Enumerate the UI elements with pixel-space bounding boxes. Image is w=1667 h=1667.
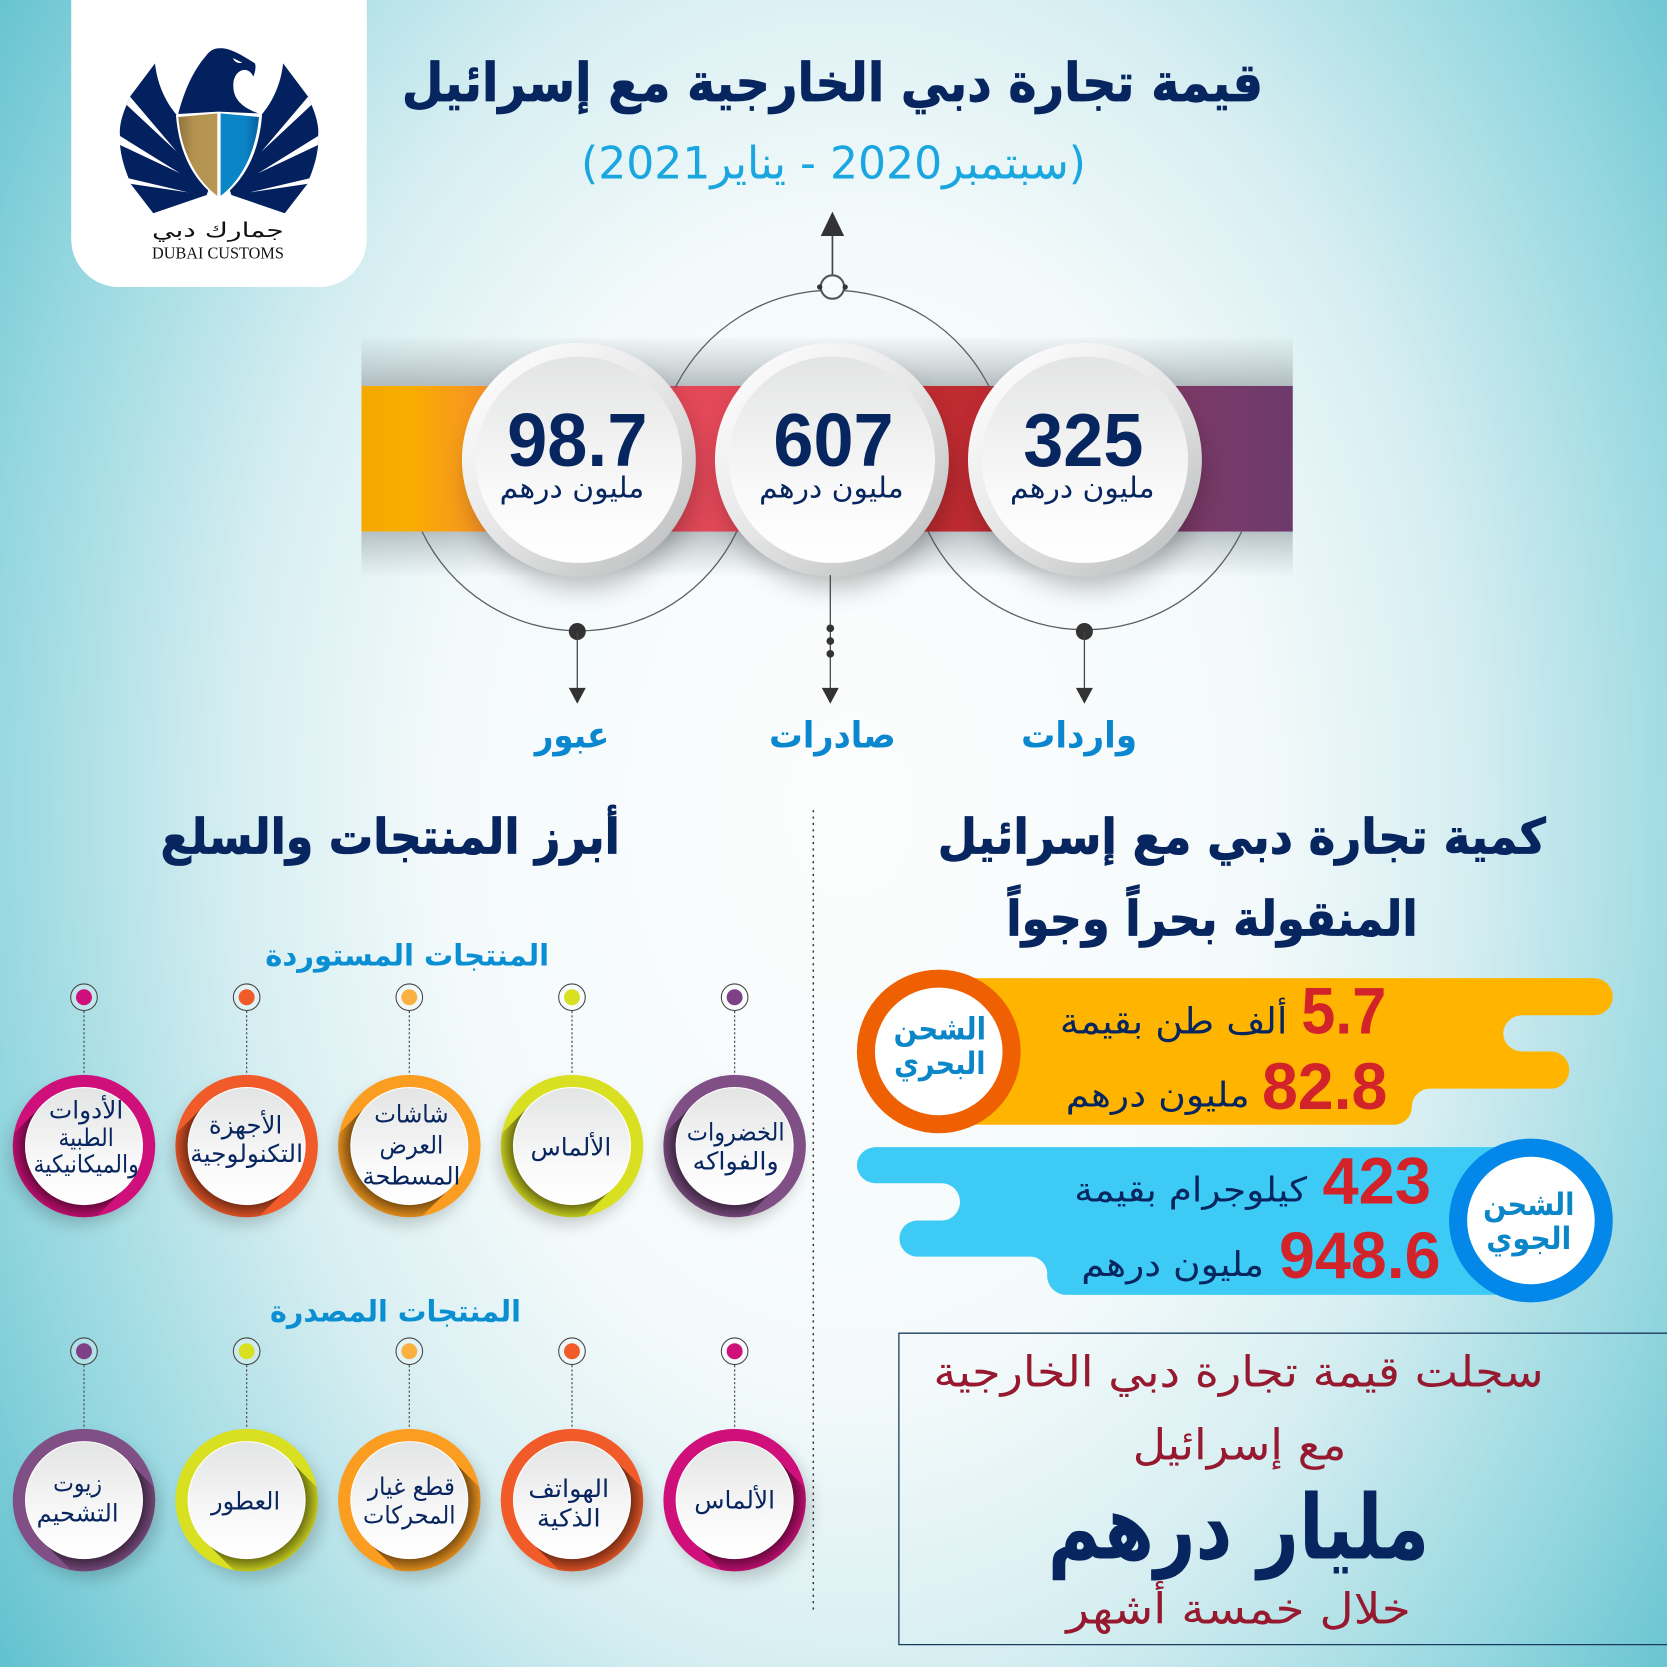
panel: air freight	[857, 1143, 1604, 1295]
item: smartphones: الذكية	[537, 1504, 601, 1533]
orange blob	[936, 978, 1613, 1125]
label: exports: صادرات	[769, 713, 896, 756]
logo card	[71, 0, 367, 287]
logo arabic name: جمارك دبي	[152, 218, 284, 243]
callout line 1: سجلت قيمة تجارة دبي الخارجية	[933, 1348, 1544, 1397]
item: engine parts: المحركات	[363, 1500, 456, 1529]
item: engine parts	[338, 1337, 492, 1585]
item: vegetables and fruit	[654, 983, 806, 1231]
value circle: transit: 98.7	[507, 398, 647, 482]
air quantity: كيلوجرام بقيمة	[1074, 1170, 1308, 1210]
panel: sea freight	[866, 973, 1613, 1125]
colored band	[361, 386, 1293, 532]
item: engine parts: قطع غيار	[366, 1472, 455, 1501]
item: smartphones: الهواتف	[528, 1474, 609, 1503]
item: medical and mechanical tools: والميكانيكية	[33, 1150, 139, 1179]
item: technology devices: التكنولوجية	[190, 1139, 303, 1168]
arrow: imports	[1076, 623, 1093, 704]
item: lubricants	[12, 1337, 166, 1584]
heading: top products: أبرز المنتجات والسلع	[161, 805, 620, 867]
value circle: imports: 325	[1023, 398, 1143, 482]
air value: مليون درهم	[1081, 1245, 1264, 1285]
sea value	[1066, 1049, 1387, 1123]
item: vegetables and fruit: الخضروات	[687, 1118, 785, 1147]
value circle: imports	[968, 343, 1202, 588]
sea value: 82.8	[1262, 1049, 1387, 1123]
arrow up	[817, 212, 848, 299]
title: قيمة تجارة دبي الخارجية مع إسرائيل	[402, 52, 1263, 114]
badge: sea freight	[866, 979, 1012, 1124]
value circle: imports: مليون درهم	[1010, 471, 1155, 505]
subheading: imported: المنتجات المستوردة	[265, 938, 549, 973]
air value: 948.6	[1279, 1218, 1441, 1292]
sea value: مليون درهم	[1066, 1076, 1250, 1116]
badge: sea freight: البحري	[894, 1046, 986, 1082]
item: technology devices	[166, 983, 318, 1231]
trade values diagram	[361, 212, 1293, 756]
air quantity	[1074, 1143, 1431, 1217]
value circle: transit: مليون درهم	[500, 471, 644, 505]
value circle: transit	[462, 343, 696, 588]
item: flat panel screens: المسطحة	[363, 1161, 460, 1190]
connector arcs	[422, 290, 1242, 631]
item: flat panel screens: العرض	[380, 1131, 443, 1160]
air value	[1081, 1218, 1441, 1292]
item: lubricants: زيوت	[53, 1469, 102, 1498]
item: diamonds	[492, 983, 644, 1231]
arrow: exports	[822, 575, 839, 704]
label: transit: عبور	[533, 713, 609, 756]
air quantity: 423	[1323, 1143, 1431, 1217]
sea quantity: ألف طن بقيمة	[1060, 997, 1287, 1042]
value circle: exports	[715, 343, 949, 588]
band shadows	[361, 338, 1293, 386]
heading: trade volume	[938, 809, 1546, 949]
item: diamonds: الألماس	[694, 1485, 775, 1515]
item: diamonds: الألماس	[531, 1132, 611, 1162]
callout: total	[899, 1333, 1667, 1645]
item: lubricants: التشحيم	[37, 1498, 119, 1527]
item: medical and mechanical tools: الطبية	[58, 1123, 114, 1152]
sea quantity: 5.7	[1301, 973, 1386, 1047]
item: perfumes: العطور	[209, 1487, 280, 1516]
value circle: exports: 607	[773, 398, 894, 482]
badge: sea freight: الشحن	[894, 1012, 986, 1048]
subheading: exported: المنتجات المصدرة	[270, 1294, 521, 1329]
value circle: exports: مليون درهم	[759, 471, 904, 505]
callout line 3: خلال خمسة أشهر	[1064, 1580, 1411, 1634]
item: technology devices: الأجهزة	[209, 1109, 282, 1139]
item: vegetables and fruit: والفواكه	[693, 1146, 779, 1175]
logo english name: DUBAI CUSTOMS	[152, 243, 284, 262]
panel: exported products	[12, 1299, 817, 1585]
callout amount: مليار درهم	[1048, 1477, 1429, 1581]
badge: air freight: الشحن	[1483, 1187, 1575, 1223]
item: diamonds	[663, 1337, 817, 1585]
badge: air freight: الجوي	[1486, 1221, 1571, 1257]
panel: imported products	[0, 938, 806, 1274]
item: medical and mechanical tools	[4, 983, 156, 1230]
arrow: transit	[569, 623, 586, 704]
blue blob	[857, 1147, 1531, 1295]
item: smartphones	[500, 1337, 654, 1585]
subtitle: period: (سبتمبر2020 - يناير2021)	[581, 138, 1086, 190]
sea quantity	[1060, 973, 1386, 1047]
heading: trade volume: المنقولة بحراً وجواً	[1006, 884, 1418, 949]
item: medical and mechanical tools: الأدوات	[49, 1094, 123, 1124]
item: flat panel screens: شاشات	[374, 1100, 449, 1129]
callout line 2: مع إسرائيل	[1133, 1422, 1346, 1471]
label: imports: واردات	[1021, 713, 1137, 756]
badge: air freight	[1458, 1148, 1604, 1293]
item: perfumes	[175, 1337, 329, 1585]
heading: trade volume: كمية تجارة دبي مع إسرائيل	[938, 809, 1546, 866]
item: flat panel screens	[329, 983, 482, 1231]
icon: Dubai Customs eagle and shield	[120, 48, 318, 213]
